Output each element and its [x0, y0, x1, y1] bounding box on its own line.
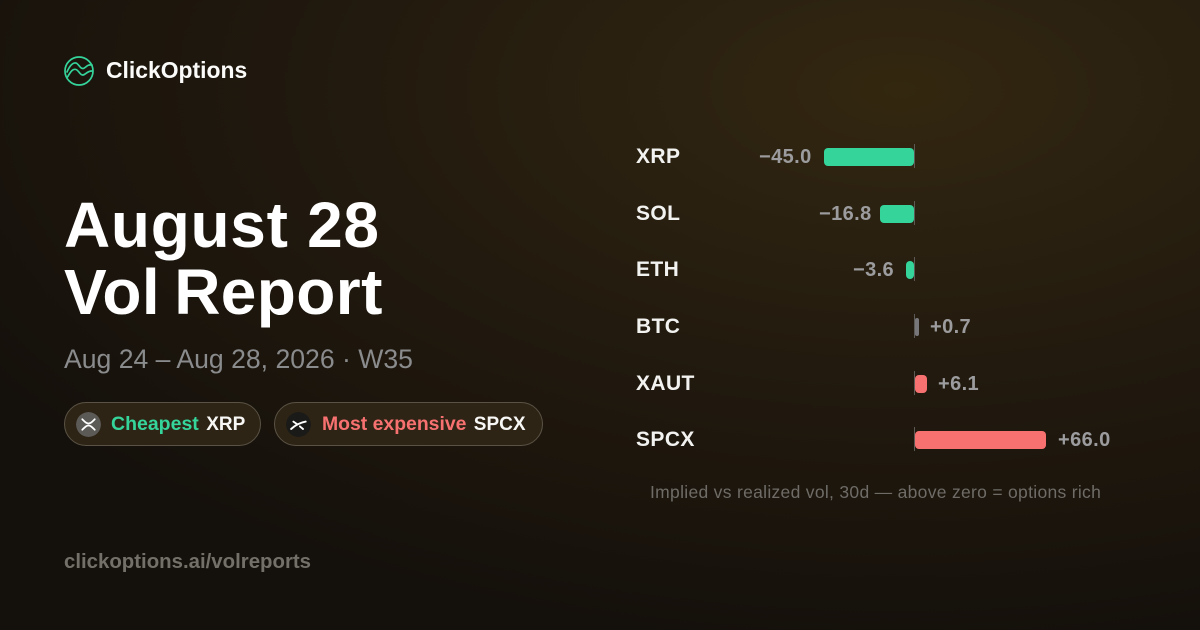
bar: BTC	[915, 318, 919, 336]
bar: ETH	[906, 261, 914, 279]
value: XAUT: +6.1	[938, 373, 979, 395]
ticker: BTC: BTC	[636, 315, 680, 338]
value: ETH: −3.6	[853, 259, 894, 281]
pill: most expensive	[274, 402, 543, 446]
bar: SOL	[880, 205, 914, 223]
value: XRP: −45.0	[759, 146, 812, 168]
pill: cheapest	[64, 402, 261, 446]
ticker: XRP: XRP	[636, 145, 680, 168]
logo	[64, 56, 247, 86]
brand name: ClickOptions	[106, 57, 247, 83]
bar: XAUT	[915, 375, 927, 393]
bar: SPCX	[915, 431, 1046, 449]
icon: SPCX	[286, 412, 311, 437]
bar: XRP	[824, 148, 914, 166]
subtitle: date range: Aug 24 – Aug 28, 2026 · W35	[64, 344, 413, 374]
label: most expensive SPCX: Most expensive SPCX	[322, 413, 526, 435]
label: cheapest XRP: Cheapest XRP	[111, 413, 245, 435]
title: August 28	[64, 189, 380, 261]
footer url: clickoptions.ai/volreports	[64, 551, 311, 573]
title: Vol Report	[64, 256, 383, 328]
icon: logo mark	[64, 56, 94, 86]
value: SPCX: +66.0	[1058, 429, 1111, 451]
ticker: SOL: SOL	[636, 202, 680, 225]
chart caption: Implied vs realized vol, 30d — above zero = options rich	[650, 482, 1101, 502]
title	[64, 189, 383, 328]
ticker: XAUT: XAUT	[636, 372, 695, 395]
value: BTC: +0.7	[930, 316, 971, 338]
ticker: ETH: ETH	[636, 258, 679, 281]
value: SOL: −16.8	[819, 203, 872, 225]
ticker: SPCX: SPCX	[636, 428, 695, 451]
icon: XRP	[76, 412, 101, 437]
